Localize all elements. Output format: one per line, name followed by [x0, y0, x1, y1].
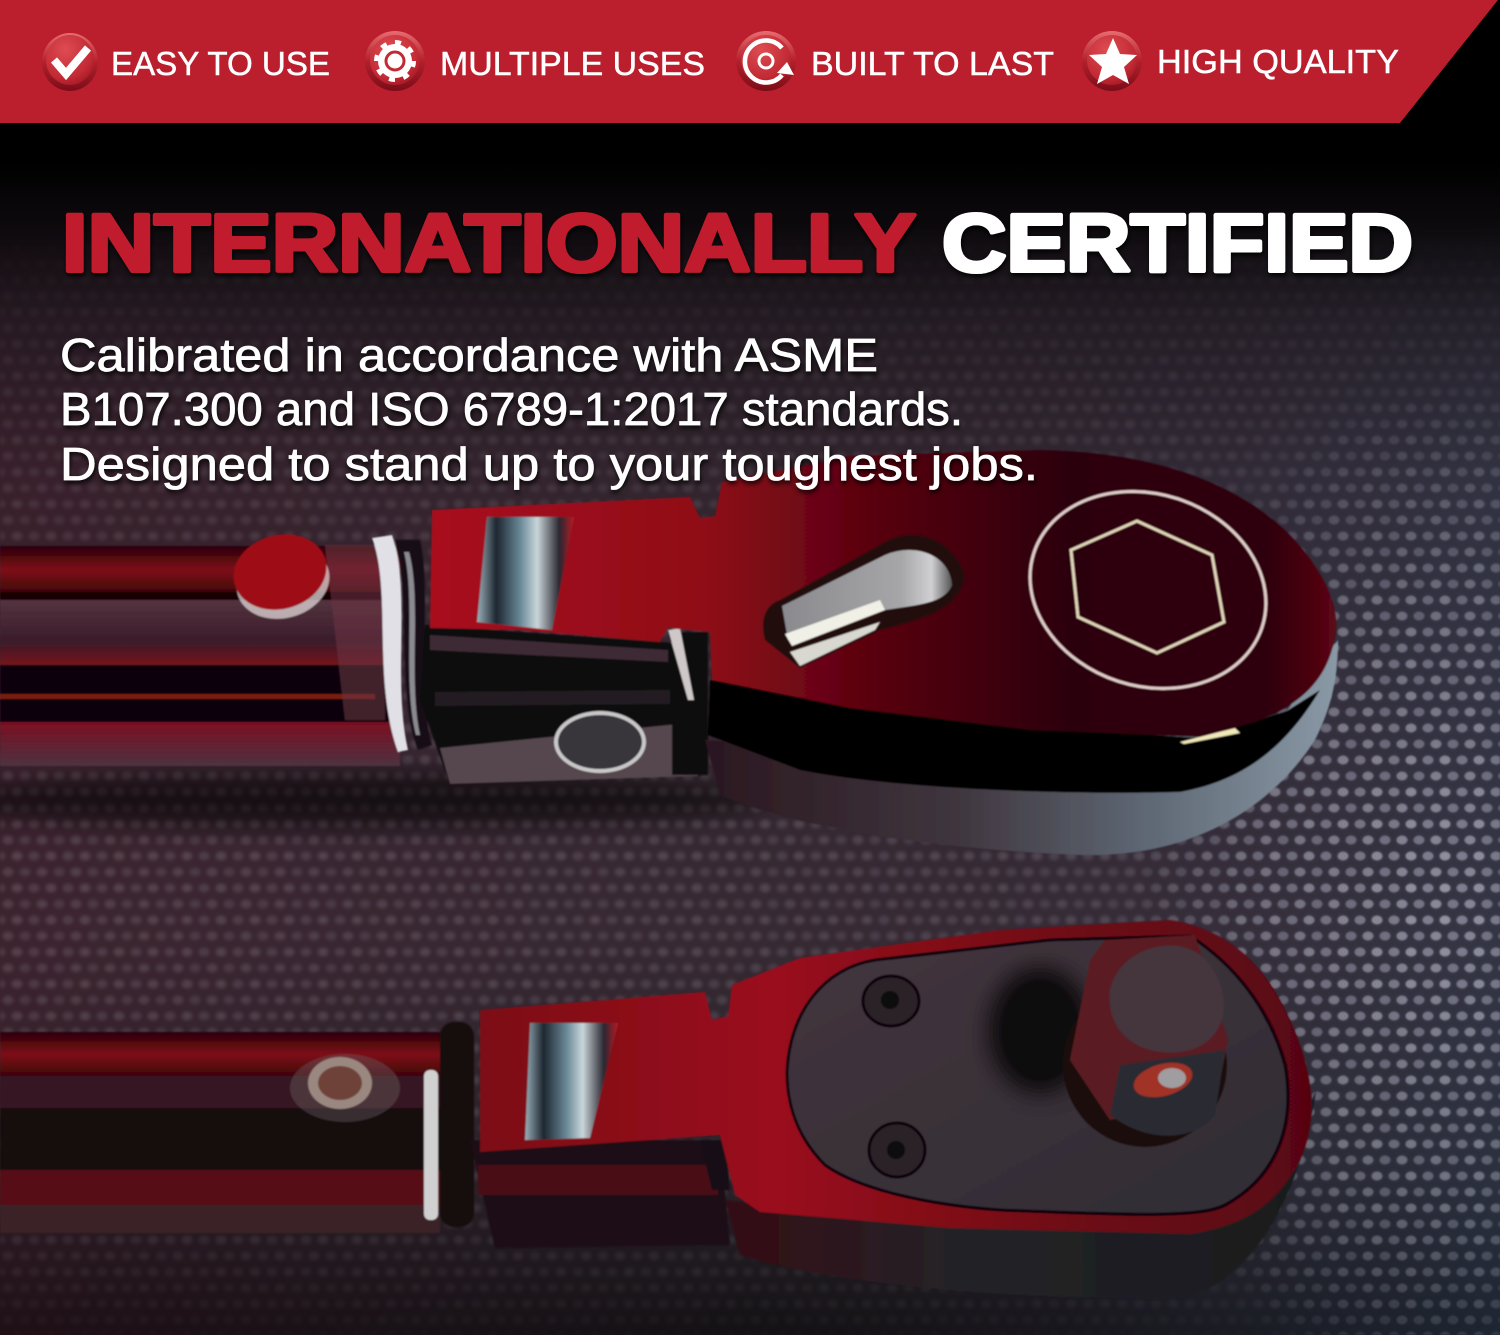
upper wrench: red top face of head: [430, 450, 1336, 737]
upper wrench: silver side body: [420, 625, 708, 784]
body text: [60, 329, 1038, 490]
label: built to last: BUILT TO LAST: [811, 45, 1054, 82]
icon: star badge: [1082, 31, 1142, 91]
body text: Calibrated in accordance with ASME: [60, 329, 878, 381]
lower wrench: side body: [470, 1140, 730, 1248]
icon: check badge: [42, 33, 98, 91]
upper wrench handle: [0, 535, 432, 766]
body text: Designed to stand up to your toughest jobs.: [60, 438, 1038, 490]
lower wrench: red body of head: [480, 920, 1311, 1234]
top banner: [0, 0, 1498, 123]
wrench: upper, torque wrench with red reflection: [0, 450, 1338, 855]
lower wrench: square drive: [1063, 935, 1228, 1147]
lower wrench: handle rivet: [290, 1054, 400, 1122]
icon: gear badge: [365, 31, 425, 91]
upper wrench: fork window: [477, 517, 574, 630]
label: high quality: HIGH QUALITY: [1157, 43, 1399, 80]
body text: B107.300 and ISO 6789-1:2017 standards.: [60, 383, 963, 435]
lower wrench: shadow around drive: [990, 968, 1090, 1092]
title: INTERNATIONALLY: [62, 198, 916, 289]
lower wrench: dark textured plate: [787, 936, 1288, 1214]
title: CERTIFIED: [942, 198, 1413, 289]
upper wrench: engraved circle and hexagon: [1004, 462, 1292, 718]
wrench: lower, showing drive square: [0, 920, 1316, 1298]
label: easy to use: EASY TO USE: [111, 45, 330, 82]
upper wrench: knurled side of head: [705, 640, 1338, 855]
upper wrench: red push button: [225, 524, 338, 629]
lower wrench: knurled side of head: [725, 1090, 1316, 1298]
upper wrench: black edge of head: [708, 680, 1320, 793]
lower wrench: fork window: [525, 1023, 618, 1140]
upper wrench: highlight on head corner: [1180, 728, 1240, 744]
lower wrench handle: [0, 1022, 474, 1233]
title: [62, 198, 1413, 289]
icon: cycle badge: [736, 31, 796, 91]
upper wrench: silver latch slot: [763, 535, 965, 668]
lower wrench: screws: [863, 976, 925, 1177]
label: multiple uses: MULTIPLE USES: [440, 45, 705, 82]
